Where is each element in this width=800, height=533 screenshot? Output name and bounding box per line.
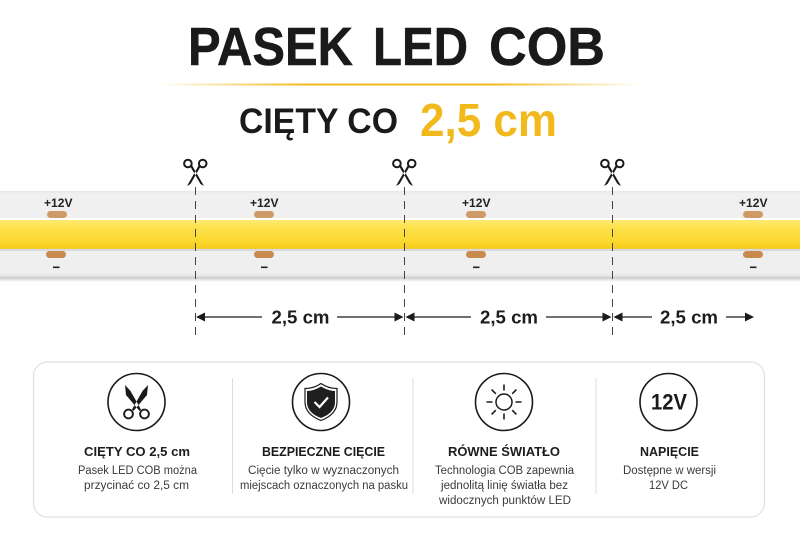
description: Cięcie tylko w wyznaczonych [248,465,399,477]
feature: voltage [623,374,716,492]
heading: RÓWNE ŚWIATŁO [448,444,560,459]
heading: CIĘTY CO 2,5 cm [84,444,190,459]
icon: 12V: 12V [651,390,687,414]
description: jednolitą linię światła bez [440,480,568,492]
dimension: first 2,5 cm [196,306,404,328]
title: COB [489,17,605,77]
title divider line [160,84,640,86]
description: miejscach oznaczonych na pasku [240,480,408,492]
subtitle: CIĘTY CO [239,102,398,141]
icon: scissors at second cut [393,160,416,186]
panel: features [34,362,764,517]
description [623,465,716,492]
dimension: first 2,5 cm: 2,5 cm [272,306,330,328]
solder pads [46,211,763,258]
voltage labels: +12V [739,196,768,210]
description: 12V DC [649,480,688,492]
feature: safe cutting [240,374,408,492]
heading: BEZPIECZNE CIĘCIE [262,444,385,459]
subtitle: 2,5 cm [420,94,557,146]
description [240,465,408,492]
heading: NAPIĘCIE [640,444,699,459]
description: Pasek LED COB można [78,465,198,477]
voltage labels: +12V [44,196,72,210]
description: Dostępne w wersji [623,465,716,477]
icon: shield [292,374,350,430]
description [78,465,198,492]
icon: scissors [108,374,165,430]
title [188,17,605,77]
feature: cut every 2,5 cm [78,374,198,492]
voltage labels: +12V [250,196,278,210]
subtitle [239,94,557,146]
dimension: second 2,5 cm: 2,5 cm [480,306,538,328]
LED strip [0,191,800,282]
dimension: third 2,5 cm [614,306,754,328]
icon: sun [476,374,532,430]
feature: even light [435,374,575,507]
dimension: second 2,5 cm [406,306,612,328]
description: przycinać co 2,5 cm [84,480,189,492]
voltage labels: +12V [462,196,490,210]
cut lines [196,187,612,336]
description: widocznych punktów LED [438,495,571,507]
title: LED [373,17,468,77]
icon: scissors at third cut [601,160,624,186]
title: PASEK [188,17,353,77]
dimension: third 2,5 cm: 2,5 cm [660,306,718,328]
description: Technologia COB zapewnia [435,465,575,477]
description [435,465,575,507]
icon: scissors at first cut [184,160,206,186]
voltage labels [44,196,768,268]
